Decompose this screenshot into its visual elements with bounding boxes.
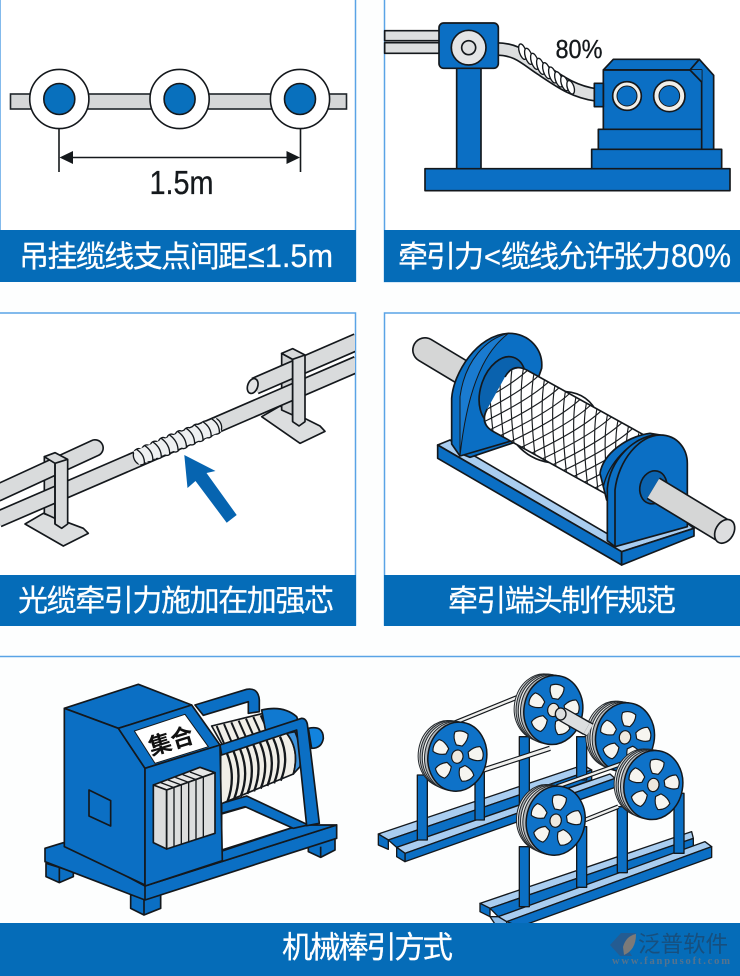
caption bar (0, 575, 356, 626)
label plate (134, 714, 208, 763)
panel: pull on strength member (0, 313, 357, 626)
watermark logo (610, 933, 636, 956)
panel: mechanical pulling (0, 656, 740, 976)
caption (19, 238, 333, 274)
panel frame (384, 0, 740, 282)
watermark url: www.fanpusoft.com (612, 956, 730, 967)
caption bar (384, 230, 740, 282)
caption bar (0, 923, 740, 976)
support rings (30, 69, 330, 129)
left rod (425, 350, 467, 375)
percent label: 80% (556, 34, 602, 64)
panel frame (0, 313, 356, 625)
panel frame (0, 0, 356, 281)
top rear tube (195, 689, 259, 715)
right bearing (636, 468, 671, 507)
front coil (221, 733, 296, 804)
right rod (653, 488, 725, 532)
caption: 缆线允许张力 (501, 241, 671, 274)
axle (562, 714, 590, 730)
caption: 光缆牵引力施加在加强芯 (18, 585, 334, 618)
front legs (519, 793, 684, 907)
rear rail (378, 765, 615, 862)
left stand (452, 333, 542, 456)
machine cabinet (64, 684, 192, 728)
rear coil (212, 713, 277, 747)
caption: 牵引端头制作规范 (448, 585, 676, 618)
right frame (220, 718, 319, 826)
rear pulleys (413, 716, 492, 796)
rear legs (417, 737, 587, 840)
panel: pulling head (384, 313, 740, 626)
right clamp base (262, 406, 325, 443)
front rail (480, 832, 712, 927)
label text: 集合 (145, 722, 197, 760)
caption (398, 238, 731, 274)
twisted splice (132, 418, 222, 466)
caption: 80% (671, 238, 731, 274)
caption bar (384, 575, 740, 626)
dimension arrow (59, 129, 300, 172)
left clamp base (25, 513, 88, 546)
arrow (184, 455, 237, 523)
panel: support spacing (0, 0, 356, 282)
panel: tension limit (384, 0, 740, 282)
cable bar (10, 94, 346, 109)
right stand (600, 433, 660, 513)
side panel (89, 790, 111, 826)
panel frame (0, 656, 740, 658)
drum end (262, 708, 305, 757)
feet (46, 863, 73, 883)
tension machine illustration (385, 23, 730, 191)
caption: 牵引力 (398, 241, 484, 274)
front belts (557, 758, 637, 787)
base platform (45, 825, 337, 900)
caption: ≤1.5m (248, 238, 333, 274)
caption: < (484, 241, 501, 274)
plate stack (153, 767, 215, 790)
watermark name: 泛普软件 (638, 932, 728, 957)
cable and clamps illustration (0, 342, 357, 546)
braided drum (483, 366, 644, 494)
caption bar (0, 230, 356, 282)
winch machine illustration (45, 684, 337, 915)
rear belts (453, 687, 543, 723)
panel frame (384, 313, 740, 625)
watermark (610, 932, 730, 967)
caption: 吊挂缆线支点间距 (19, 241, 248, 274)
caption: 机械棒引方式 (282, 931, 453, 965)
base frame (438, 440, 694, 552)
pulley rig illustration (378, 669, 712, 927)
front pulleys (511, 780, 591, 860)
pulling head illustration (425, 333, 739, 565)
dimension label: 1.5m (150, 164, 214, 201)
